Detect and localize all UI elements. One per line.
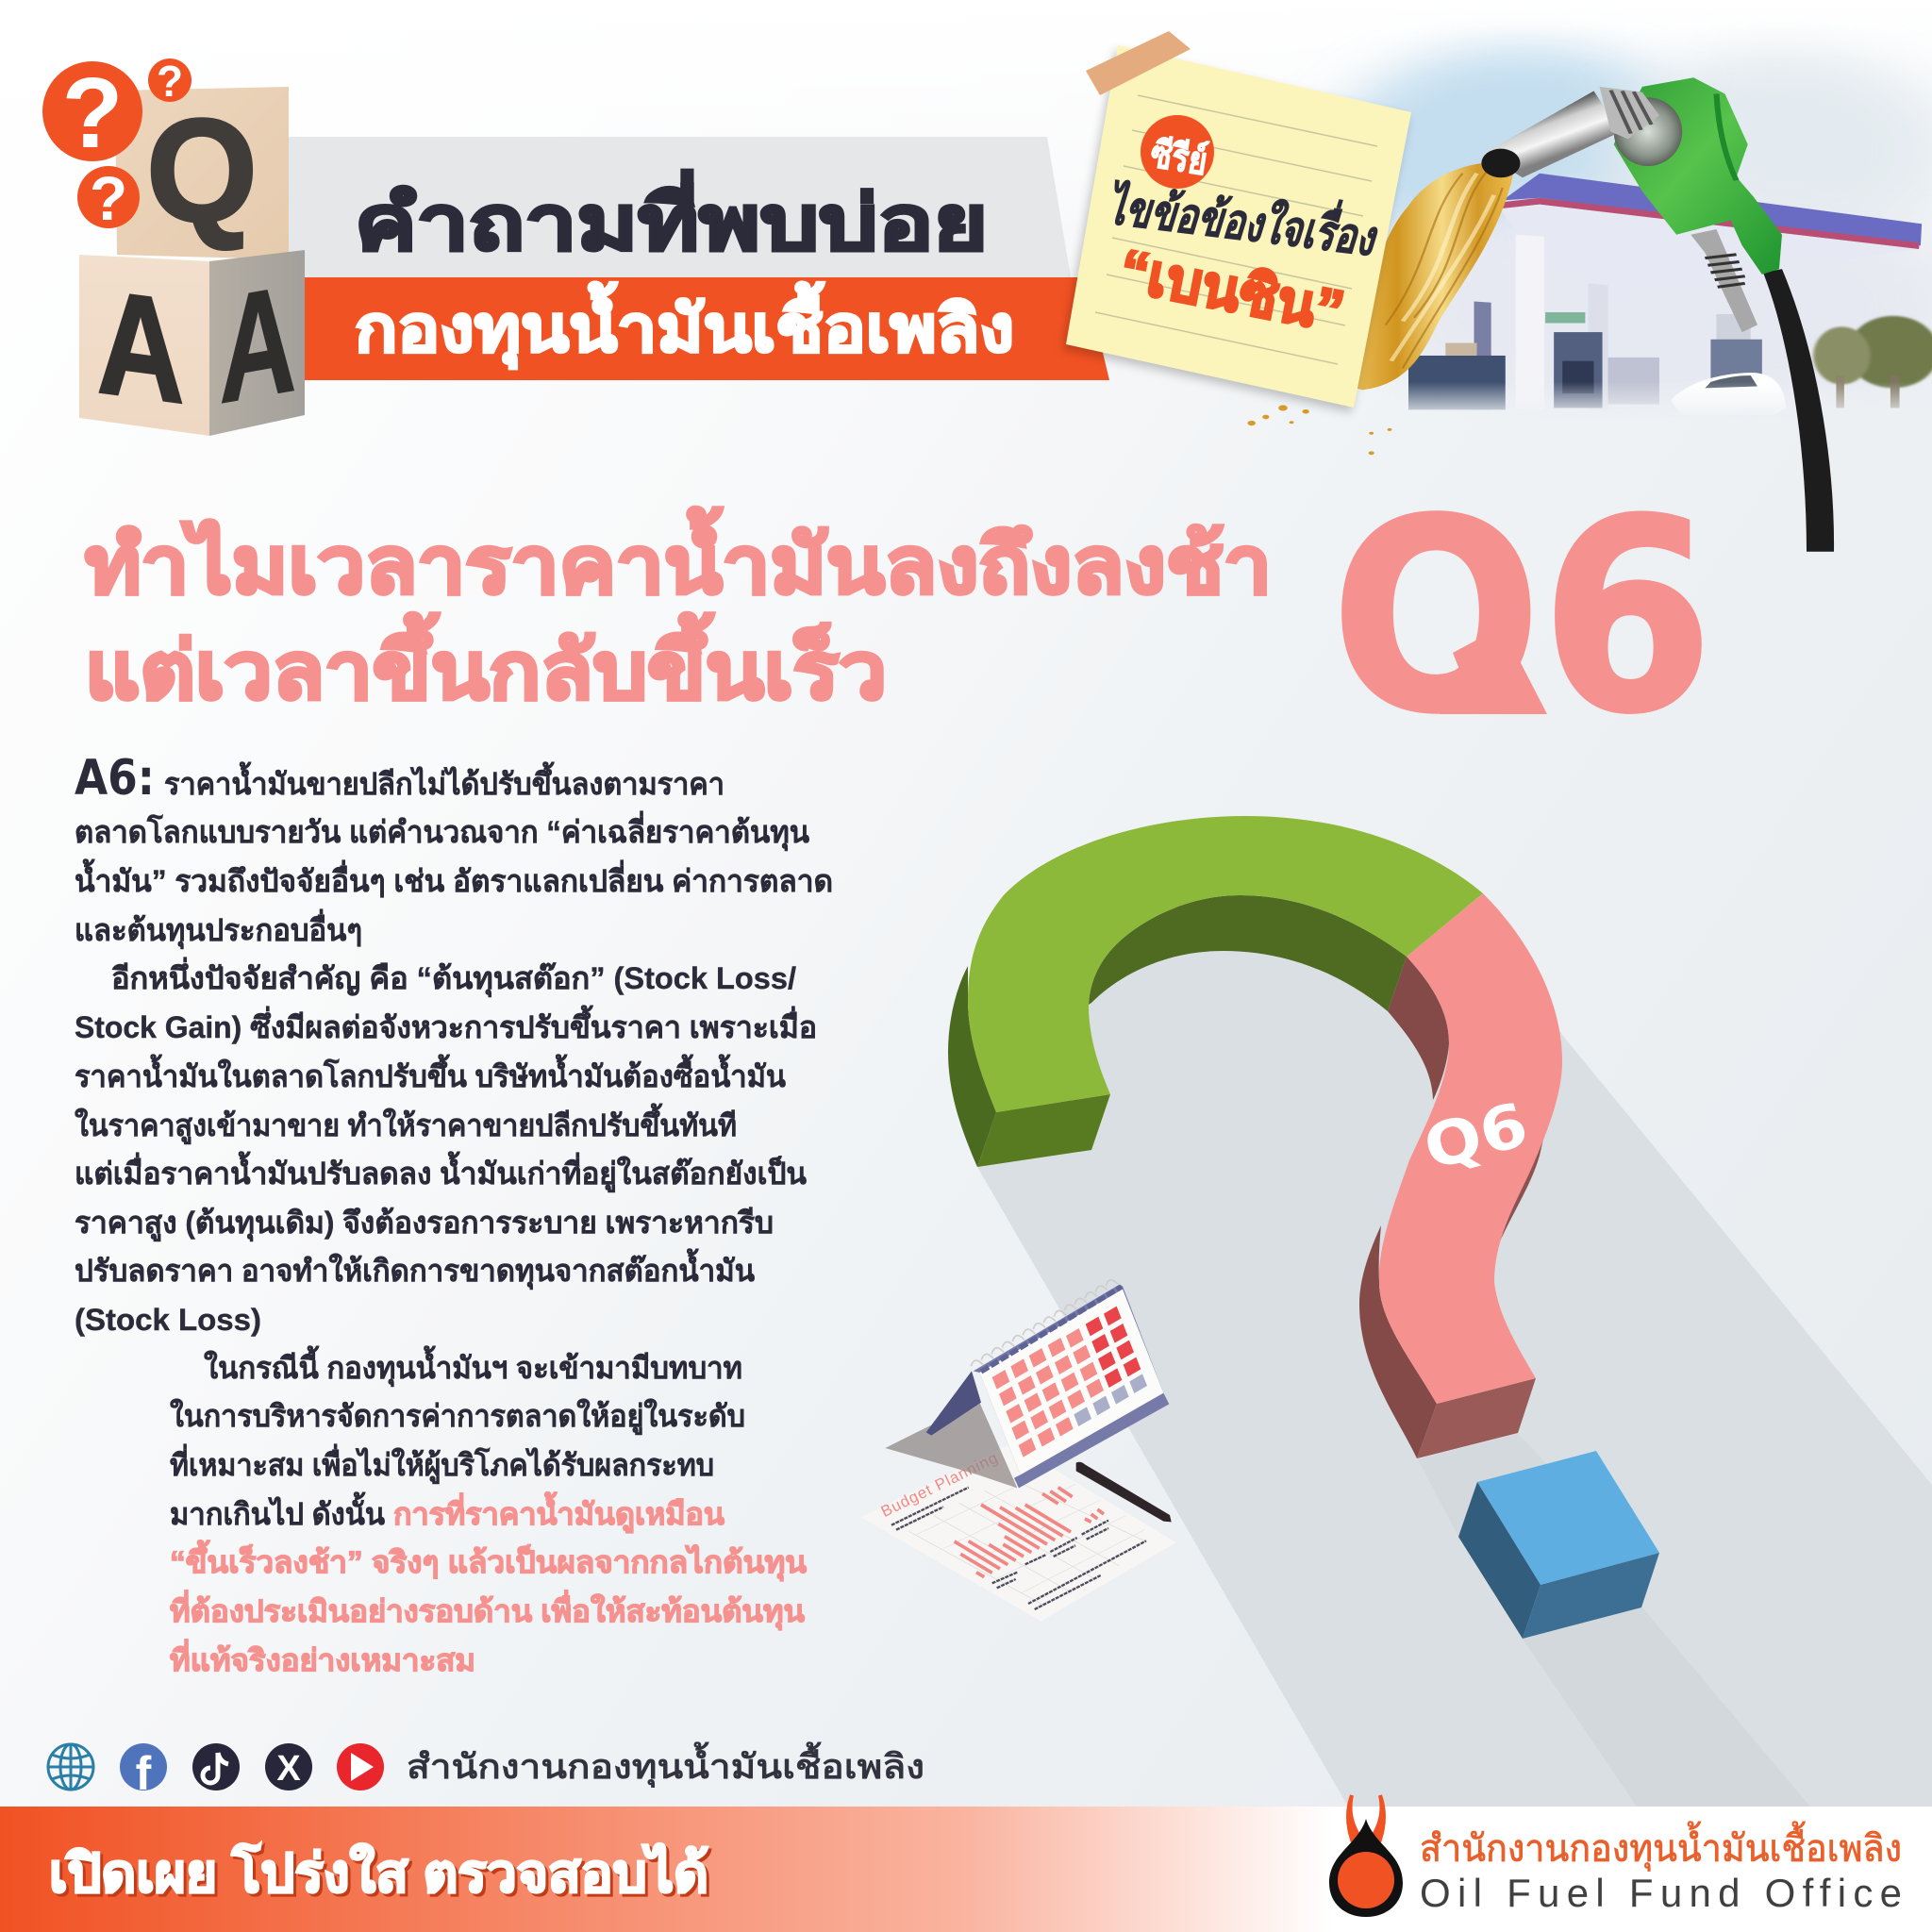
green nozzle handle (1614, 77, 1782, 332)
series badge (1141, 115, 1214, 189)
nozzle pipe (1481, 87, 1659, 177)
car (1672, 373, 1786, 408)
social icons (48, 1743, 384, 1800)
fuel pumps (1408, 332, 1762, 409)
paragraph 1 and 2: (Stock Loss) (75, 1303, 261, 1337)
heading: frequently asked questions: คำถามที่พบบ่อย (355, 170, 988, 265)
question title (85, 507, 1272, 715)
paragraph 1 and 2: ตลาดโลกแบบรายวัน แต่คำนวณจาก “ค่าเฉลี่ยราคาต้นทุน (75, 810, 809, 852)
calendar and budget sheet (861, 1280, 1176, 1621)
question title: ทำไมเวลาราคาน้ำมันลงถึงลงช้า (85, 507, 1272, 609)
big Q6 (1341, 510, 1702, 714)
paragraph 1 and 2: ราคาน้ำมันในตลาดโลกปรับขึ้น บริษัทน้ำมันต้องซื้อน้ำมัน (75, 1054, 786, 1093)
paragraph 1 and 2: ปรับลดราคา อาจทำให้เกิดการขาดทุนจากสต๊อกน้ำมัน (75, 1248, 755, 1291)
icon: facebook (120, 1743, 167, 1800)
paragraph 3: ในการบริหารจัดการค่าการตลาดให้อยู่ในระดับ (170, 1398, 745, 1436)
paragraph 1 and 2: อีกหนึ่งปัจจัยสำคัญ คือ “ต้นทุนสต๊อก” (Stock Loss/ (111, 957, 796, 998)
highlighted conclusion (170, 1491, 807, 1677)
highlighted conclusion: “ขึ้นเร็วลงช้า” จริงๆ แล้วเป็นผลจากกลไกต้นทุน (170, 1540, 807, 1582)
sky (1334, 47, 1932, 426)
calendar shadow (885, 1403, 1017, 1488)
logo mark (1329, 1795, 1403, 1917)
budget planning sheet: Budget Planning (878, 1449, 1000, 1521)
calendar back (926, 1371, 981, 1436)
note line 2: “เบนซิน” (1114, 238, 1349, 345)
Q block: Q (146, 89, 258, 252)
station scene and nozzle illustration (1247, 47, 1932, 552)
long shadow of question mark (968, 924, 1932, 1807)
answer label: A6: (75, 750, 155, 807)
heading: oil fuel fund: กองทุนน้ำมันเชื้อเพลิง (355, 281, 1014, 369)
footer slogan: เปิดเผย โปร่งใส ตรวจสอบได้ (52, 1845, 711, 1906)
footer bar (0, 1807, 1932, 1932)
question title: แต่เวลาขึ้นกลับขึ้นเร็ว (85, 612, 887, 715)
paragraph 1 and 2: แต่เมื่อราคาน้ำมันปรับลดลง น้ำมันเก่าที่อยู่ในสต๊อกยังเป็น (75, 1151, 807, 1193)
paragraph 1 and 2: ราคาสูง (ต้นทุนเดิม) จึงต้องรอการระบาย เพราะหากรีบ (75, 1206, 774, 1242)
highlighted conclusion: การที่ราคาน้ำมันดูเหมือน (393, 1491, 724, 1534)
icon: X: X (276, 1749, 301, 1789)
3D question mark (948, 816, 1562, 1458)
highlighted conclusion: ที่แท้จริงอย่างเหมาะสม (170, 1639, 475, 1677)
sticky note (1066, 31, 1411, 408)
office name: สำนักงานกองทุนน้ำมันเชื้อเพลิง (407, 1741, 924, 1789)
note paper (1066, 45, 1411, 408)
paragraph 1 and 2: ในราคาสูงเข้ามาขาย ทำให้ราคาขายปลีกปรับขึ้นทันที (75, 1103, 737, 1145)
note line 1: ไขข้อข้องใจเรื่อง (1099, 173, 1388, 266)
icon: tiktok (192, 1743, 240, 1790)
oil stream (1247, 162, 1514, 455)
icon: website globe (48, 1744, 93, 1790)
paragraph 3: มากเกินไป ดังนั้น (170, 1491, 385, 1531)
icon: youtube (337, 1743, 384, 1790)
pink top face (1379, 893, 1562, 1404)
banner: orange subtitle strip (305, 277, 1109, 380)
A block (79, 250, 305, 436)
logo: oil fuel fund office (1329, 1795, 1902, 1917)
icon: question bubbles (42, 57, 192, 233)
icon: question bubbles: ? (157, 57, 183, 106)
green top face (968, 816, 1483, 1112)
calendar page (971, 1280, 1169, 1488)
fuel hose (1763, 269, 1834, 552)
Q6 label on question mark: Q6 (1417, 1091, 1535, 1184)
pen (1076, 1462, 1172, 1522)
answer text (75, 750, 833, 1677)
budget planning sheet (861, 1443, 1176, 1621)
scene masked (1334, 47, 1932, 426)
blue cube (1458, 1451, 1659, 1639)
paragraph 1 and 2: ราคาน้ำมันขายปลีกไม่ได้ปรับขึ้นลงตามราคา (164, 761, 724, 801)
gas station canopy (1474, 174, 1922, 409)
palm trees (1813, 316, 1932, 408)
logo English name: Oil Fuel Fund Office (1420, 1871, 1902, 1915)
banner: grey title strip (289, 137, 1071, 277)
paragraph 1 and 2: Stock Gain) ซึ่งมีผลต่อจังหวะการปรับขึ้นราคา เพราะเมื่อ (75, 1005, 817, 1044)
paragraph 1 and 2: น้ำมัน” รวมถึงปัจจัยอื่นๆ เช่น อัตราแลกเปลี่ยน ค่าการตลาด (75, 858, 833, 898)
A block: A (97, 259, 184, 434)
icon: QA wooden blocks (79, 87, 305, 436)
A block: A (220, 254, 296, 436)
logo Thai name: สำนักงานกองทุนน้ำมันเชื้อเพลิง (1420, 1821, 1902, 1872)
calendar day cells (992, 1307, 1147, 1457)
Q block (115, 87, 289, 259)
highlighted conclusion: ที่ต้องประเมินอย่างรอบด้าน เพื่อให้สะท้อนต้นทุน (170, 1590, 805, 1631)
tape (1086, 31, 1191, 95)
paragraph 3: ในกรณีนี้ กองทุนน้ำมันฯ จะเข้ามามีบทบาท (204, 1345, 742, 1388)
paragraph 3 (170, 1345, 745, 1531)
paragraph 3: ที่เหมาะสม เพื่อไม่ให้ผู้บริโภคได้รับผลกระทบ (170, 1443, 714, 1485)
icon: question bubbles: ? (62, 58, 123, 169)
paragraph 1 and 2 (75, 761, 833, 1337)
footer slogan: เปิดเผย โปร่งใส ตรวจสอบได้ (49, 1842, 708, 1903)
icon: question bubbles: ? (90, 163, 127, 233)
icon: facebook: f (136, 1747, 152, 1800)
icon: X (265, 1743, 312, 1790)
big Q6: Q6 (1331, 464, 1713, 772)
paragraph 1 and 2: และต้นทุนประกอบอื่นๆ (75, 908, 362, 950)
pink side faces (1359, 957, 1547, 1458)
green side faces (948, 895, 1407, 1167)
series badge: ซีรีย์ (1148, 132, 1210, 183)
